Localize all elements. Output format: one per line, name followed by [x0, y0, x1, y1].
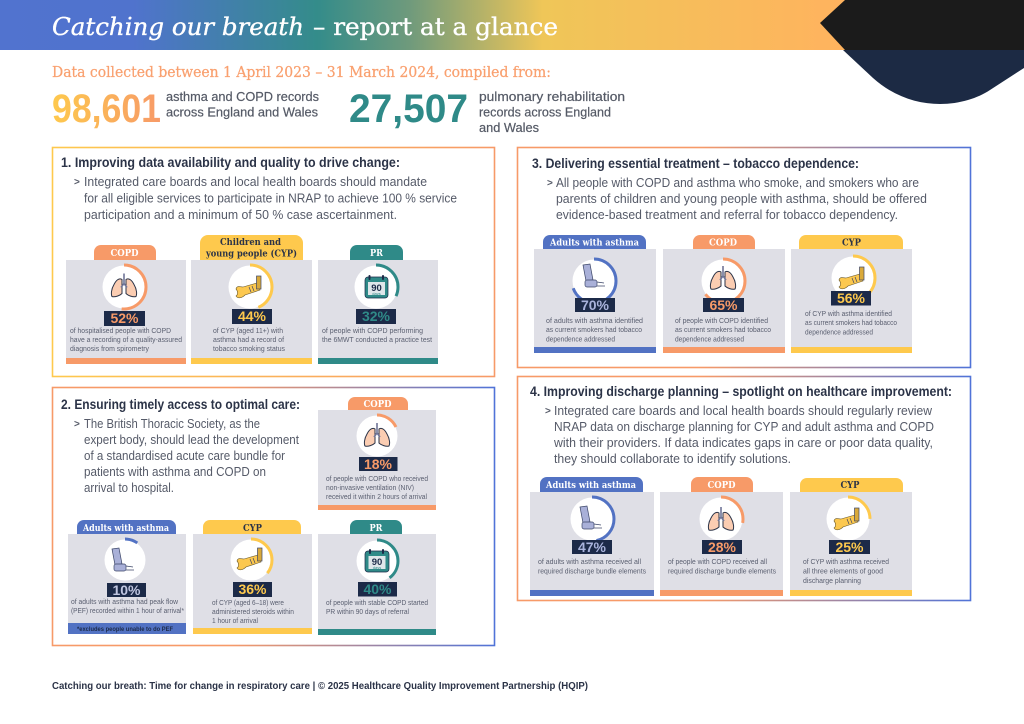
recommendation 2: expert body, should lead the development [84, 432, 299, 447]
card: PR 40%: of people with stable COPD started [326, 598, 428, 607]
card: COPD 52% [66, 245, 186, 364]
heading 4: 4. Improving discharge planning – spotlight on healthcare improvement: [530, 384, 952, 399]
stat: pulmonary rehabilitation records: records across England [479, 106, 611, 120]
recommendation 2 [74, 416, 299, 495]
card: adults with asthma 70%: as current smokers had tobacco [546, 325, 642, 334]
card: adults with asthma 10% [68, 520, 186, 634]
icon: calendar: 90 [371, 283, 382, 294]
icon: calendar: 90 [372, 557, 382, 568]
card: COPD 65%: dependence addressed [675, 334, 744, 344]
card: COPD 65%: COPD [709, 238, 737, 248]
card: CYP 25%: discharge planning [803, 576, 861, 585]
card: CYP 56%: of CYP with asthma identified [805, 309, 892, 318]
card: CYP 56% [791, 235, 912, 353]
recommendation 3: > [547, 178, 553, 189]
card: CYP 36%: administered steroids within [212, 607, 294, 616]
stat: pulmonary rehabilitation records [349, 87, 625, 135]
title: Catching our breath [52, 13, 304, 41]
card: PR 40%: PR [370, 523, 383, 534]
recommendation 2: > [74, 419, 80, 430]
corner shape: navy curve [843, 50, 1024, 104]
recommendation 4: > [545, 406, 551, 417]
recommendation 4: NRAP data on discharge planning for CYP and adult asthma and COPD [554, 419, 934, 434]
card: CYP 25%: CYP [840, 480, 860, 491]
corner shape: black arrow [820, 0, 1024, 50]
recommendation 1: for all eligible services to participate in NRAP to achieve 100 % service [84, 190, 457, 206]
card: CYP 44%: asthma had a record of [213, 335, 285, 344]
card: COPD 18%: of people with COPD who received [326, 474, 428, 483]
card: adults with asthma 10%: of adults with asthma had peak flow [71, 597, 178, 606]
card: COPD 18%: 18% [364, 456, 393, 472]
card: PR 40% [318, 520, 436, 635]
card: COPD 28%: of people with COPD received all [668, 557, 767, 566]
card: PR 40%: PR within 90 days of referral [326, 607, 409, 616]
stat: pulmonary rehabilitation records: pulmonary rehabilitation [479, 90, 625, 104]
card: CYP 36%: 1 hour of arrival [212, 616, 258, 625]
card: CYP 36%: 36% [238, 581, 267, 597]
stat: asthma and COPD records: asthma and COPD records [166, 90, 319, 104]
card: CYP 56%: dependence addressed [805, 328, 873, 336]
card: COPD 65%: 65% [709, 297, 738, 313]
header banner [0, 0, 1024, 50]
recommendation 3: All people with COPD and asthma who smoke, and smokers who are [556, 175, 919, 190]
card: adults with asthma 70%: 70% [581, 297, 610, 313]
card: CYP 44%: Children and [220, 237, 281, 248]
card: adults with asthma 47%: required discharge bundle elements [538, 566, 646, 576]
icon: calendar: days [373, 565, 381, 570]
recommendation 2: The British Thoracic Society, as the [84, 416, 260, 431]
card: adults with asthma 70%: of adults with asthma identified [546, 316, 643, 325]
card: CYP 25%: all three elements of good [803, 566, 883, 576]
card: adults with asthma 70% [534, 235, 656, 353]
card: CYP 56%: 56% [837, 290, 866, 306]
card: COPD 52%: of hospitalised people with COPD [70, 326, 171, 335]
card: COPD 52%: COPD [110, 248, 138, 259]
card: CYP 36%: of CYP (aged 6–18) were [212, 598, 284, 607]
card: PR 32% [318, 245, 438, 364]
panel 1: data availability [52, 148, 494, 376]
heading 2: 2. Ensuring timely access to optimal care: [61, 397, 300, 412]
card: COPD 65% [663, 235, 785, 353]
footer: Catching our breath: Time for change in respiratory care | © 2025 Healthcare Quality Improvement Partnership (HQIP) [52, 681, 588, 692]
recommendation 1 [74, 174, 457, 222]
title: – report at a glance [313, 13, 558, 41]
stat: pulmonary rehabilitation records: 27,507 [349, 87, 468, 131]
recommendation 1: > [74, 177, 80, 188]
card: CYP 56%: CYP [842, 238, 861, 248]
panel 2: timely access [52, 388, 494, 646]
card: CYP 25% [790, 478, 912, 596]
icon: calendar [365, 275, 388, 298]
card: adults with asthma 47%: 47% [578, 539, 607, 555]
card: COPD 65%: as current smokers had tobacco [675, 325, 771, 334]
card: PR 32%: the 6MWT conducted a practice test [322, 335, 433, 344]
icon: calendar [365, 549, 389, 572]
card: CYP 36% [193, 520, 312, 634]
panel 4: discharge planning [518, 376, 970, 600]
recommendation 4: they should collaborate to identify solutions. [554, 451, 791, 466]
stat: asthma and COPD records: across England and Wales [166, 106, 318, 120]
recommendation 2: patients with asthma and COPD on [84, 464, 266, 479]
card: COPD 52%: 52% [110, 310, 139, 326]
card: CYP 25%: of CYP with asthma received [803, 557, 889, 566]
recommendation 1: Integrated care boards and local health boards should mandate [84, 174, 427, 189]
card: PR 32%: PR [370, 248, 383, 259]
heading 3: 3. Delivering essential treatment – tobacco dependence: [532, 156, 859, 171]
card: PR 32%: 32% [362, 308, 391, 324]
card: adults with asthma 47%: of adults with asthma received all [538, 557, 641, 566]
recommendation 3: parents of children and young people with asthma, should be offered [556, 191, 927, 206]
card: CYP 44%: young people (CYP) [205, 248, 297, 260]
card: COPD 52%: diagnosis from spirometry [70, 344, 149, 353]
recommendation 2: arrival to hospital. [84, 480, 174, 495]
card: PR 40%: 40% [363, 581, 392, 597]
recommendation 4: Integrated care boards and local health boards should regularly review [554, 403, 933, 418]
stat: pulmonary rehabilitation records: and Wales [479, 121, 539, 135]
recommendation 3 [547, 175, 927, 222]
card: PR 32%: of people with COPD performing [322, 326, 423, 335]
card: adults with asthma 10%: 10% [112, 582, 141, 598]
card: CYP 44%: tobacco smoking status [213, 344, 285, 353]
card: adults with asthma 47%: Adults with asthma [545, 480, 636, 491]
card: COPD 28%: 28% [708, 539, 737, 555]
panel 3: tobacco dependence [518, 148, 970, 368]
card: COPD 18% [318, 397, 436, 510]
recommendation 4 [545, 403, 934, 466]
card: COPD 65%: of people with COPD identified [675, 316, 768, 325]
title [52, 13, 558, 41]
card: COPD 18%: COPD [364, 399, 392, 410]
card: COPD 52%: have a recording of a quality-assured [70, 335, 182, 344]
data collection subtitle: Data collected between 1 April 2023 – 31 March 2024, compiled from: [52, 65, 551, 81]
recommendation 2: of a standardised acute care bundle for [84, 448, 286, 463]
card: CYP 25%: 25% [835, 539, 864, 555]
card: COPD 18%: received it within 2 hours of arrival [326, 492, 427, 501]
card: COPD 28% [660, 477, 783, 596]
card: adults with asthma 10%: (PEF) recorded within 1 hour of arrival* [71, 606, 184, 615]
card: adults with asthma 70%: Adults with asthma [549, 238, 639, 248]
card: COPD 28%: required discharge bundle elements [668, 566, 776, 576]
heading 1: 1. Improving data availability and quality to drive change: [61, 155, 400, 170]
card: COPD 28%: COPD [708, 480, 736, 491]
stat: asthma and COPD records [52, 87, 319, 131]
stat: asthma and COPD records: 98,601 [52, 87, 161, 131]
card: adults with asthma 10%: Adults with asthma [82, 523, 169, 534]
card: COPD 18%: non-invasive ventilation (NIV) [326, 483, 414, 492]
card: CYP 44%: of CYP (aged 11+) with [213, 326, 283, 335]
recommendation 1: participation and a minimum of 50 % case ascertainment. [84, 207, 397, 222]
footnote: *excludes people unable to do PEF [77, 626, 173, 633]
card: CYP 56%: as current smokers had tobacco [805, 318, 897, 327]
recommendation 4: with their providers. If data indicates gaps in care or poor data quality, [553, 435, 933, 450]
card: CYP 36%: CYP [243, 523, 262, 534]
card: adults with asthma 47% [530, 477, 654, 596]
card: CYP 44% [191, 235, 312, 364]
recommendation 3: evidence-based treatment and referral for tobacco dependency. [556, 207, 898, 222]
card: adults with asthma 70%: dependence addressed [546, 334, 615, 344]
card: CYP 44%: 44% [238, 308, 267, 324]
icon: calendar: days [372, 291, 381, 296]
